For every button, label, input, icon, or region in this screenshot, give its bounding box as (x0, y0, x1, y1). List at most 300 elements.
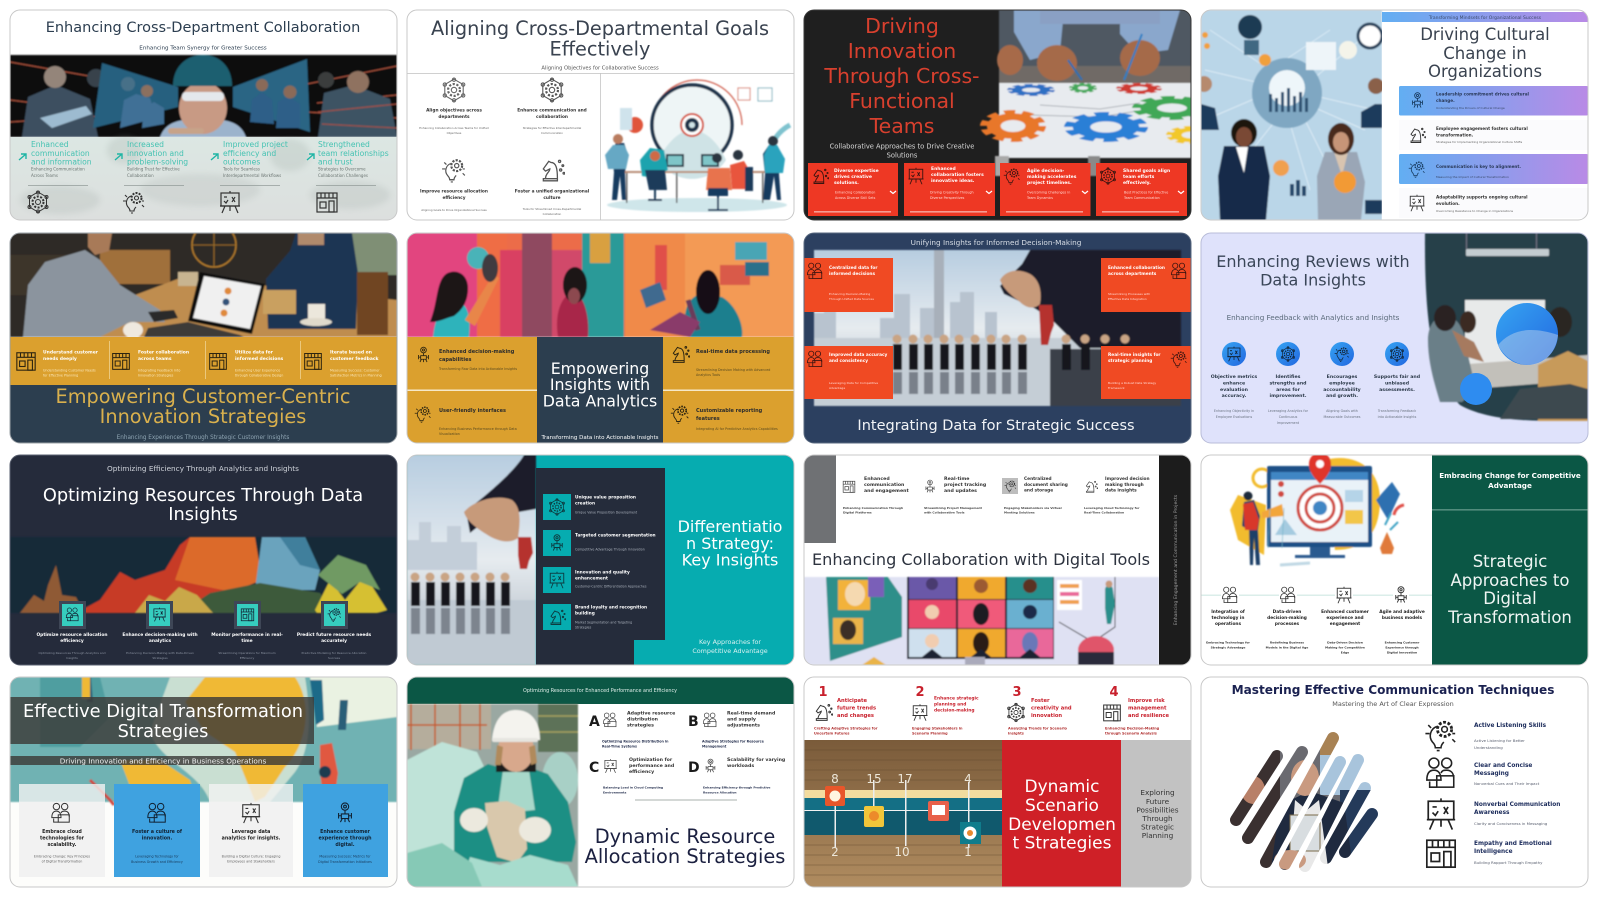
item 4: Building Rapport Through Empathy (1474, 860, 1543, 865)
row 4: Adaptability supports ongoing cultural (1436, 194, 1528, 200)
column 2 (115, 140, 188, 213)
item 2: Enhancing Business Performance through Data (439, 427, 517, 431)
card 2: Enhanced (931, 166, 956, 172)
item 4: building (575, 610, 595, 616)
card 3: Agile decision- (1027, 168, 1064, 174)
column 2: problem-solving (127, 158, 188, 166)
photo: meeting room in curved frame (1425, 233, 1588, 421)
gold panels (407, 337, 794, 443)
title: n Strategy: (686, 534, 774, 553)
panel: Enhancing Cross-Department Collaboration (10, 10, 397, 220)
title: Innovation Strategies (100, 405, 306, 428)
header: Unifying Insights for Informed Decision-Making (911, 238, 1081, 247)
item 3: Customer-Centric Differentiation Approaches (575, 584, 647, 588)
item 3: Utilize data for (235, 350, 274, 356)
card 4: effectively. (1123, 180, 1151, 186)
top strip (1382, 22, 1385, 220)
item D (688, 757, 785, 794)
column 4 (297, 601, 371, 660)
item 3 (543, 567, 647, 593)
title: Allocation Strategies (585, 845, 785, 868)
column 2: Building Trust for Effective (127, 166, 180, 172)
item 2: and updates (944, 488, 977, 494)
item 1: Understanding Customer Needs (43, 368, 96, 372)
item 3: document sharing (1024, 482, 1068, 488)
card 2: Leveraging Technology for (135, 854, 179, 858)
item A: distribution (627, 716, 658, 722)
item A: A (589, 714, 600, 730)
card 2: Foster a culture of (132, 829, 183, 835)
illustration: target and team at desk (605, 80, 790, 212)
subtitle: Through (1141, 814, 1173, 823)
box: improved accuracy: Advantage (829, 386, 845, 390)
card 3: making accelerates (1027, 174, 1077, 180)
item 1: Align objectives across (426, 108, 482, 114)
item 4 (671, 406, 778, 431)
item 2: collaboration (536, 114, 568, 120)
title: Differentiatio (678, 517, 782, 536)
card 4 (1096, 163, 1187, 216)
subtitle: Enhancing Experiences Through Strategic Customer Insights (117, 435, 289, 441)
card 4: Enhance customer (320, 829, 371, 835)
item 1: Anticipate (837, 698, 868, 704)
column 2 (1268, 342, 1309, 425)
item 1: Unique value proposition (575, 494, 636, 500)
card 4: Measuring Success: Metrics for (319, 854, 371, 858)
column 4: Strengthened (318, 140, 370, 149)
step 1: technology in (1212, 615, 1244, 621)
title: Functional (849, 89, 955, 113)
column 3: Aligning Goals with (1326, 409, 1358, 413)
photo: team with holographic screens (10, 55, 397, 137)
card 3: Overcoming Challenges in (1027, 190, 1070, 194)
item 2: User-friendly interfaces (439, 408, 506, 414)
item 4: and resilience (1128, 713, 1169, 719)
box: centralized data: informed decisions (829, 271, 875, 277)
card 1: scalability. (48, 842, 77, 848)
title band (10, 385, 397, 443)
panel: Enhancing Reviews with Data Insights (1201, 233, 1588, 443)
item 1: Enhancing Communication Through (843, 506, 903, 510)
step 3: experience and (1326, 615, 1364, 621)
item D: Resource Allocation (703, 790, 737, 794)
step 1 (1206, 585, 1250, 650)
illustration: marketer and target on a monitor (1230, 453, 1404, 565)
title: t Strategies (1013, 834, 1112, 854)
item B: Real-time demand (727, 710, 775, 716)
box: enhanced collaboration: Streamlining Processes with (1108, 292, 1150, 296)
faded lower band (10, 137, 397, 220)
column 1: accuracy. (1222, 393, 1247, 399)
strip text: Transforming Mindsets for Organizational Success (1428, 15, 1542, 21)
item 3: Insights (1008, 732, 1024, 736)
row 3 (1399, 154, 1588, 184)
item C: C (589, 760, 599, 776)
box: real-time insights: Framework (1108, 386, 1125, 390)
box: enhanced collaboration (1101, 258, 1191, 312)
subtitle: Key Approaches for (699, 638, 761, 646)
title: Enhancing Reviews with (1216, 252, 1410, 271)
step 2: Data-driven (1273, 609, 1301, 615)
item 4: Real-Time Collaboration (1084, 510, 1124, 514)
row 4: evolution. (1436, 201, 1460, 206)
item 4: Market Segmentation and Targeting (575, 620, 632, 624)
panel: Enhancing Collaboration with Digital Tools (804, 455, 1191, 665)
subtitle: Enhancing Feedback with Analytics and Insights (1227, 313, 1400, 322)
column 3 (211, 140, 288, 213)
card 4: Best Practices for Effective (1124, 190, 1168, 194)
item 3 (420, 160, 488, 212)
subtitle bar (10, 756, 314, 765)
title: Integrating Data for Strategic Success (857, 418, 1135, 434)
connector line (1201, 594, 1432, 596)
column 3: accountability (1323, 387, 1361, 393)
dark list panel (536, 468, 665, 665)
panel: Dynamic Scenario Development Strategies (804, 677, 1191, 887)
column 2: Leveraging Analytics for (1268, 409, 1309, 413)
step 4: Enhancing Customer (1385, 640, 1420, 644)
panel: Driving Innovation Through Cross-Functional Teams (804, 10, 1213, 220)
card 1: Embrace cloud (42, 829, 82, 835)
photo: warehouse worker (407, 704, 578, 887)
box: real-time insights: strategic planning (1108, 358, 1152, 364)
card 3: Leverage data (232, 829, 270, 835)
illustration: business people and network (1196, 10, 1384, 220)
item D: Scalability for varying (727, 757, 785, 763)
illustration: women with colourful data (407, 233, 794, 337)
column 4: accurately (321, 638, 347, 644)
item 3: Real-time data processing (696, 349, 770, 355)
step 1: operations (1215, 621, 1241, 627)
item 4: Improved decision (1105, 476, 1150, 482)
photo: hand moving a red figure (814, 250, 1181, 406)
column 3: outcomes (223, 158, 260, 166)
card 4: Shared goals align (1123, 168, 1170, 174)
title: Innovation (848, 39, 956, 63)
title: Empowering (551, 359, 649, 378)
item B: adjustments (727, 722, 760, 728)
item 3: 3 (1012, 685, 1022, 700)
card 1: Across Diverse Skill Sets (835, 196, 876, 200)
item 3: Enhancing User Experience (235, 368, 280, 372)
title: Digital (1483, 589, 1537, 608)
item 4: Empathy and Emotional (1474, 841, 1552, 847)
card 3: Team Dynamics (1026, 196, 1053, 200)
card 1 (19, 784, 105, 877)
title: Mastering Effective Communication Techniques (1232, 683, 1554, 697)
header: Embracing Change for Competitive (1439, 471, 1581, 480)
column 2: improvement. (1269, 393, 1307, 399)
item 2 (912, 685, 979, 736)
card 3 (209, 784, 293, 877)
title: Enhancing Collaboration with Digital Tools (812, 550, 1150, 569)
item 1: Enhancing Collaboration Across Teams for Unified (419, 126, 489, 130)
item 1 (419, 78, 489, 135)
card 2 (904, 163, 995, 216)
item 4 (1104, 685, 1169, 736)
item 2: 2 (915, 685, 925, 700)
subtitle: Competitive Advantage (692, 647, 768, 655)
item 4: management (1128, 706, 1167, 712)
item 1: Transforming Raw Data into Actionable Insights (438, 367, 517, 371)
illustration: globe and people (10, 677, 397, 805)
column 3: Interdepartmental Workflows (223, 173, 281, 178)
title: Teams (869, 114, 934, 138)
item 3: Improve resource allocation (420, 188, 488, 194)
card 1: solutions. (834, 180, 859, 186)
item 3: creativity and (1031, 706, 1072, 712)
title: Data Insights (1260, 270, 1366, 290)
title: Through Cross- (823, 64, 980, 88)
column 3: Measurable Outcomes (1324, 415, 1361, 419)
item 2: Clear and Concise (1474, 763, 1532, 769)
item 4: Foster a unified organizational (515, 188, 590, 194)
step 4: Experience through (1385, 646, 1419, 650)
item 2: Messaging (1474, 771, 1509, 777)
column 1: Insights (66, 656, 78, 660)
column 2: Enhancing Decision-Making with Data-Driven (126, 651, 194, 655)
item 4: Customizable reporting (696, 408, 763, 414)
item B: Management (702, 744, 727, 748)
column 2: Improvement (1277, 421, 1300, 425)
box: real-time insights (1101, 346, 1191, 399)
timeline illustration on wood: 4 (964, 772, 972, 786)
item 3 (673, 346, 770, 377)
timeline illustration on wood: 10 (894, 845, 910, 859)
timeline illustration on wood: 2 (831, 845, 839, 859)
item 3 (1008, 685, 1072, 736)
item 3: Foster (1031, 698, 1050, 704)
item 1: and engagement (864, 488, 909, 494)
column 1: Across Teams (31, 173, 58, 178)
vertical text: Enhancing Engagement and Communication in Projects (1173, 494, 1179, 625)
column 2: analytics (149, 638, 171, 644)
item 3: through Collaborative Design (235, 374, 283, 378)
column 3: Improved project (223, 140, 288, 149)
column 4: Supports fair and (1374, 374, 1420, 380)
panel: Empowering Customer-Centric Innovation Strategies (10, 223, 397, 443)
step 2: Redefining Business (1270, 640, 1304, 644)
item 1: communication (864, 482, 904, 488)
item 1: 1 (818, 685, 828, 700)
item 2: project tracking (944, 482, 986, 488)
illustration: video call grid (804, 577, 1159, 665)
item 2 (517, 78, 587, 135)
card 1: of Digital Transformation (42, 860, 82, 864)
centre panel (537, 337, 663, 443)
item 3: enhancement (575, 576, 608, 582)
title: Enhancing Cross-Department Collaboration (46, 20, 360, 36)
panel: Dynamic Resource Allocation Strategies (407, 677, 794, 887)
item 4 (515, 160, 590, 216)
card 1: Diverse expertise (834, 168, 879, 174)
column 3: and growth. (1326, 393, 1358, 399)
column 1: Enhancing Communication (31, 166, 85, 172)
item 4 (543, 604, 647, 630)
item 2: Integrating Feedback into (138, 368, 180, 372)
subtitle: Exploring (1140, 788, 1175, 797)
column 4: Predictive Modeling for Resource Allocation (302, 651, 367, 655)
item 3: Engaging Stakeholders via Virtual (1004, 506, 1062, 510)
item 4: making through (1105, 482, 1144, 488)
subtitle: Planning (1142, 831, 1173, 840)
row 3: Measuring the Impact of Cultural Transformation (1436, 175, 1509, 179)
item 2 (1427, 758, 1540, 787)
row 2 (1410, 126, 1528, 144)
timeline illustration on wood: 1 (964, 845, 972, 859)
column 2: Collaboration (127, 173, 154, 178)
column 1: communication (31, 149, 90, 158)
title: Strategies (118, 721, 208, 742)
column 3: employee (1329, 380, 1355, 386)
column 1: efficiency (60, 638, 84, 644)
column 4: team relationships (318, 149, 389, 158)
item 4 (305, 350, 382, 378)
column 1: enhance (1223, 380, 1245, 386)
step 4: Agile and adaptive (1379, 609, 1425, 615)
subtitle: Possibilities (1136, 806, 1179, 814)
title: Empowering Customer-Centric (56, 385, 350, 408)
title: Effective Digital Transformation (23, 701, 303, 722)
box: centralized data (804, 258, 893, 312)
item 3: Analyzing Trends for Scenario (1008, 726, 1068, 730)
column 4: into Actionable Insights (1378, 415, 1417, 419)
item 2 (924, 476, 986, 514)
title: Change in (1443, 44, 1527, 63)
item 4: Iterate based on (330, 350, 372, 356)
column 1: Optimizing Resources Through Analytics and (38, 651, 106, 655)
item 2: Enhance communication and (517, 108, 587, 114)
step 3: engagement (1330, 621, 1360, 627)
item 1 (543, 494, 638, 520)
column 3: Encourages (1327, 374, 1358, 380)
panel: Optimizing Resources Through Data Insights (10, 455, 397, 665)
item 2 (415, 407, 517, 436)
column 4: assessments. (1379, 387, 1415, 393)
item 3 (1427, 798, 1560, 830)
item 2 (113, 350, 189, 378)
item 4: 4 (1109, 685, 1119, 700)
panel: Strategic Approaches to Digital Transformation (1201, 453, 1588, 665)
item 4: Tools for Streamlined Cross-Departmental (522, 207, 581, 211)
row 2: Strategies for Implementing Organizational Culture Shifts (1436, 140, 1523, 144)
title: Effectively (550, 38, 650, 60)
item 3: Clarity and Conciseness in Messaging (1474, 821, 1548, 826)
column 3 (1323, 342, 1361, 419)
item 1: needs deeply (43, 356, 77, 362)
item 3: innovation (1031, 713, 1062, 719)
item 2: Streamlining Project Management (924, 506, 983, 510)
box: improved accuracy: Leveraging Data for Competitive (829, 381, 878, 385)
column 4: and trust (318, 158, 353, 166)
card 4: Digital Transformation Initiatives (318, 860, 372, 864)
step 1: Integration of (1211, 609, 1245, 615)
item 2 (543, 530, 656, 556)
title: Key Insights (682, 550, 778, 570)
item 3: Innovation and quality (575, 570, 630, 576)
box: enhanced collaboration: Enhanced collaboration (1108, 265, 1165, 271)
column 3: Monitor performance in real- (211, 632, 283, 638)
item D: D (688, 760, 700, 776)
card 2: Business Growth and Efficiency (131, 860, 183, 864)
column 2: Strategies (152, 656, 168, 660)
title: Insights with (550, 375, 650, 394)
card 4 (303, 784, 388, 877)
title: Optimizing Resources Through Data (43, 485, 363, 506)
panel: Mastering Effective Communication Techniques (1201, 677, 1588, 887)
card 3: Employees and Stakeholders (227, 860, 275, 864)
box: improved accuracy: and consistency (829, 358, 868, 364)
item 4: culture (543, 195, 561, 201)
step 3: Data-Driven Decision (1327, 640, 1363, 644)
item A: strategies (627, 722, 654, 728)
subtitle: Aligning Objectives for Collaborative Success (541, 66, 659, 72)
subtitle: Collaborative Approaches to Drive Creative (830, 142, 974, 150)
column 3: efficiency and (223, 149, 276, 158)
item 4: Leveraging Cloud Technology for (1084, 506, 1140, 510)
item 4: Improve risk (1128, 698, 1165, 704)
item 4: Strategies (575, 626, 592, 630)
panel: Integrating Data for Strategic Success (804, 233, 1191, 443)
item C: Balancing Load in Cloud Computing (603, 786, 663, 790)
column 3: time (241, 638, 253, 644)
panel: Effective Digital Transformation Strategies (10, 677, 397, 887)
item 1: Uncertain Futures (814, 732, 850, 736)
card 4: experience through (318, 836, 372, 842)
item 1 (814, 685, 878, 736)
header: Optimizing Efficiency Through Analytics and Insights (107, 464, 299, 473)
column 4: Success (328, 656, 340, 660)
header: Advantage (1488, 481, 1532, 490)
item 2: across teams (138, 356, 172, 362)
item 2: decision-making (934, 708, 975, 714)
item 2: Enhance strategic (934, 696, 979, 702)
photo: two people at a laptop in a cafe (10, 234, 396, 337)
item 1: capabilities (439, 357, 472, 363)
item 2: with Collaborative Tools (924, 510, 965, 514)
column 3 (211, 601, 283, 660)
card 3: analytics for insights. (222, 836, 281, 842)
column 1 (36, 601, 108, 660)
item B (688, 710, 775, 748)
column 1: and information (31, 158, 92, 166)
card 4: team efforts (1123, 174, 1155, 180)
item B: B (688, 714, 699, 730)
item A: Adaptive resource (627, 710, 675, 716)
item 4: data insights (1105, 488, 1137, 494)
item 4 (1427, 840, 1552, 867)
card 4: digital. (335, 842, 355, 848)
item 4: features (696, 416, 720, 422)
column 2: strengths and (1269, 380, 1307, 386)
box: real-time insights: Real-time insights for (1108, 352, 1161, 358)
card 4: Team Communication (1123, 196, 1160, 200)
title: Organizations (1428, 62, 1542, 81)
grey panel (1121, 740, 1191, 887)
item 4: Satisfaction Metrics in Planning (330, 374, 382, 378)
card 2: innovative ideas. (931, 178, 975, 184)
item D: workloads (727, 763, 754, 769)
subtitle: Solutions (887, 152, 918, 160)
item 2: Nonverbal Cues and Their Impact (1474, 781, 1540, 786)
row 1 (1399, 86, 1588, 116)
item 4: Enhancing Decision-Making (1105, 726, 1160, 730)
box: centralized data: Through Unified Data Sources (828, 297, 874, 301)
column 1 (1211, 342, 1257, 419)
item 2: Real-time (944, 476, 969, 482)
card 1: Embracing Change: Key Principles (34, 854, 90, 858)
item A: Real-Time Systems (602, 744, 637, 748)
